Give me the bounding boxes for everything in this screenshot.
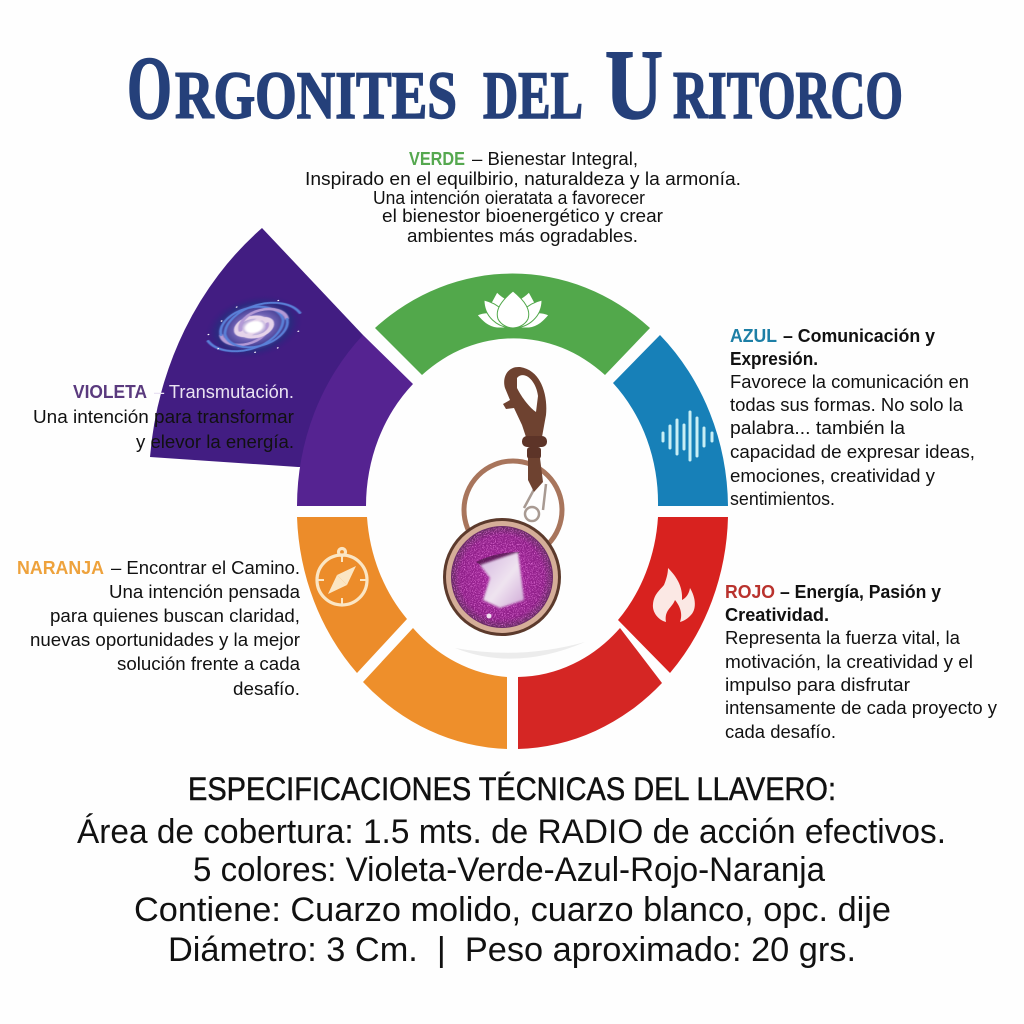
text block: violeta: – Transmutación. — [154, 381, 294, 402]
text block: naranja: Una intención pensada — [109, 581, 301, 602]
segment: red lower — [518, 628, 662, 749]
segment: violet — [297, 335, 413, 506]
text block: azul — [730, 325, 975, 509]
silver chain — [524, 482, 546, 521]
text block: violeta: VIOLETA — [73, 381, 147, 402]
title: DEL — [483, 57, 583, 133]
title — [127, 29, 903, 140]
text block: azul: capacidad de expresar ideas, — [730, 441, 975, 462]
text block: rojo: intensamente de cada proyecto y — [725, 697, 998, 718]
clasp collar and link — [522, 436, 547, 492]
text block: rojo: Representa la fuerza vital, la — [725, 627, 961, 648]
text block: azul: Expresión. — [730, 348, 818, 369]
text block: rojo: impulso para disfrutar — [725, 674, 910, 695]
text block: naranja: desafío. — [233, 678, 300, 699]
text block: azul: todas sus formas. No solo la — [730, 394, 964, 415]
icon: galaxy — [198, 285, 310, 369]
specifications — [77, 771, 946, 969]
text block: azul: sentimientos. — [730, 488, 835, 509]
text block: rojo: – Energía, Pasión y — [780, 581, 942, 602]
text block: verde: el bienestor bioenergético y crear — [382, 205, 663, 226]
medallion — [443, 518, 561, 636]
title: O — [127, 39, 172, 138]
text block: violeta: y elevor la energía. — [136, 431, 294, 452]
specifications: 5 colores: Violeta-Verde-Azul-Rojo-Naranja — [193, 851, 825, 889]
title: U — [605, 29, 663, 140]
clasp — [503, 367, 546, 437]
text block: naranja: solución frente a cada — [117, 653, 301, 674]
text block: naranja: para quienes buscan claridad, — [50, 605, 300, 626]
text block: azul: emociones, creatividad y — [730, 465, 936, 486]
text block: naranja: nuevas oportunidades y la mejor — [30, 629, 300, 650]
keychain photo — [443, 367, 585, 659]
text block: azul: AZUL — [730, 325, 777, 346]
text block: naranja — [17, 557, 301, 699]
text block: verde: VERDE — [409, 148, 465, 169]
title: RGONITES — [175, 57, 457, 133]
text block: azul: palabra... también la — [730, 417, 906, 438]
text block: naranja: NARANJA — [17, 557, 104, 578]
segment: orange upper — [297, 517, 407, 673]
text block: azul: Favorece la comunicación en — [730, 371, 969, 392]
key ring — [464, 461, 562, 559]
icon: flame — [653, 568, 695, 622]
text block: violeta — [33, 381, 294, 452]
segment: blue — [613, 335, 728, 506]
text block: verde — [305, 148, 741, 246]
segment: red upper — [618, 517, 728, 673]
text block: verde: Una intención oieratata a favorecer — [373, 187, 645, 208]
text block: violeta: Una intención para transformar — [33, 406, 294, 427]
text block: rojo: ROJO — [725, 581, 775, 602]
crystal — [480, 552, 524, 608]
segment: orange lower — [363, 628, 507, 749]
ring chart — [297, 274, 728, 749]
specifications: Área de cobertura: 1.5 mts. de RADIO de acción efectivos. — [77, 813, 946, 851]
icon: sound wave — [663, 412, 712, 460]
segment: green — [375, 274, 650, 375]
text block: verde: – Bienestar Integral, — [472, 148, 638, 169]
text block: azul: – Comunicación y — [783, 325, 936, 346]
text block: verde: ambientes más ogradables. — [407, 225, 638, 246]
specifications: Contiene: Cuarzo molido, cuarzo blanco, opc. dije — [134, 891, 891, 929]
panel: violet fan behind ring — [150, 228, 363, 467]
text block: naranja: – Encontrar el Camino. — [111, 557, 300, 578]
shadow under ring opening — [455, 642, 585, 659]
icon: lotus — [477, 291, 549, 328]
text block: rojo: Creatividad. — [725, 604, 829, 625]
text block: verde: Inspirado en el equilbirio, naturaldeza y la armonía. — [305, 168, 741, 189]
text block: rojo: cada desafío. — [725, 721, 836, 742]
text block: rojo — [725, 581, 998, 742]
title: RITORCO — [673, 57, 903, 133]
icon: compass — [317, 548, 367, 605]
specifications: ESPECIFICACIONES TÉCNICAS DEL LLAVERO: — [188, 771, 836, 807]
specifications: Diámetro: 3 Cm. | Peso aproximado: 20 grs. — [168, 931, 856, 969]
text block: rojo: motivación, la creatividad y el — [725, 651, 973, 672]
